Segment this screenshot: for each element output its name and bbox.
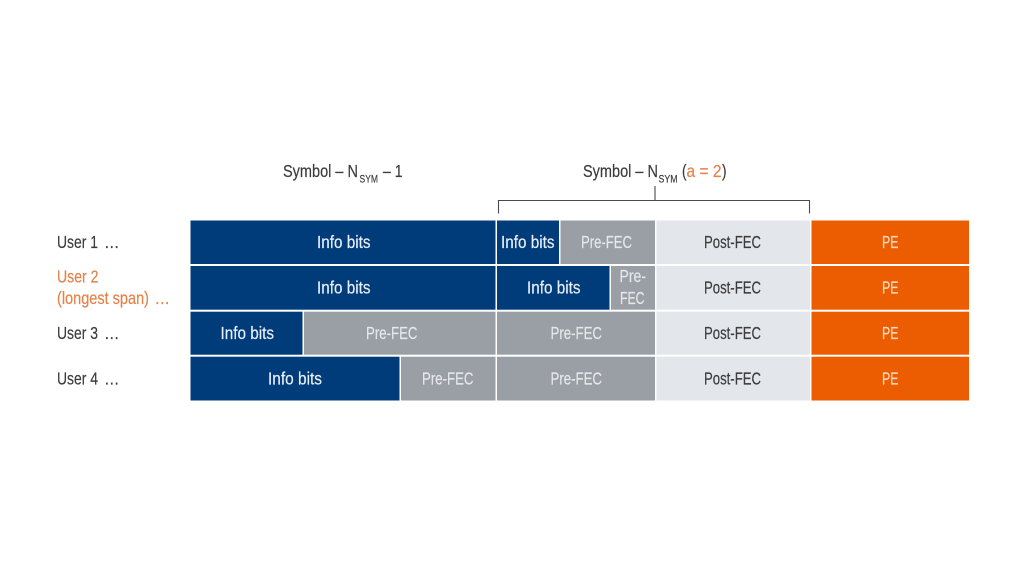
heading: symbol N_SYM with a equals 2: a = 2 bbox=[686, 161, 722, 181]
row: user 2: Pre- bbox=[620, 266, 646, 286]
row: user 1 bbox=[190, 220, 969, 264]
row: user 4: Post-FEC bbox=[704, 368, 761, 388]
row labels bbox=[57, 232, 170, 388]
row: user 2 bbox=[190, 266, 969, 310]
heading: symbol N_SYM with a equals 2: ) bbox=[722, 161, 726, 181]
row: user 4 bbox=[190, 357, 969, 400]
row: user 3 bbox=[190, 312, 969, 355]
row: user 3: Post-FEC bbox=[704, 323, 761, 343]
label: user 2 longest span: (longest span) bbox=[57, 288, 149, 308]
heading: symbol N_SYM minus 1 bbox=[283, 161, 402, 186]
heading: symbol N_SYM minus 1: – 1 bbox=[383, 161, 402, 181]
heading: symbol N_SYM minus 1: SYM bbox=[360, 174, 378, 186]
row: user 2: FEC bbox=[620, 288, 644, 308]
row: user 1: Info bits bbox=[317, 232, 371, 252]
heading: symbol N_SYM with a equals 2 bbox=[583, 161, 726, 186]
label: user 1: … bbox=[104, 232, 120, 252]
bracket spanning symbol N_SYM bbox=[498, 186, 810, 214]
label: user 3: … bbox=[104, 323, 120, 343]
row: user 1: Info bits bbox=[501, 232, 555, 252]
row: user 2: Post-FEC bbox=[704, 278, 761, 298]
row: user 3: Info bits bbox=[220, 323, 274, 343]
row: user 2: PE bbox=[882, 278, 898, 298]
row: user 2: Info bits bbox=[527, 278, 581, 298]
row: user 1: PE bbox=[882, 232, 898, 252]
frame chart: user rows bbox=[190, 220, 969, 400]
label: user 4: User 4 bbox=[57, 368, 98, 388]
label: user 2 longest span: User 2 bbox=[57, 266, 98, 286]
row: user 2: Info bits bbox=[317, 278, 371, 298]
row: user 1: Post-FEC bbox=[704, 232, 761, 252]
row: user 1: Pre-FEC bbox=[581, 232, 632, 252]
heading: symbol N_SYM with a equals 2: Symbol – N bbox=[583, 161, 658, 181]
row: user 4: Info bits bbox=[268, 368, 322, 388]
row: user 3: Pre-FEC bbox=[550, 323, 602, 343]
label: user 2 longest span: … bbox=[154, 288, 170, 308]
label: user 3: User 3 bbox=[57, 323, 98, 343]
label: user 4: … bbox=[104, 368, 120, 388]
heading: symbol N_SYM with a equals 2: SYM bbox=[658, 174, 678, 186]
label: user 2 longest span bbox=[57, 266, 170, 308]
label: user 1: User 1 bbox=[57, 232, 98, 252]
row: user 3: PE bbox=[882, 323, 898, 343]
row: user 4: PE bbox=[882, 368, 898, 388]
heading: symbol N_SYM minus 1: Symbol – N bbox=[283, 161, 358, 181]
row: user 4: Pre-FEC bbox=[550, 368, 602, 388]
row: user 4: Pre-FEC bbox=[422, 368, 474, 388]
heading: symbol N_SYM with a equals 2: ( bbox=[682, 161, 687, 181]
row: user 3: Pre-FEC bbox=[366, 323, 418, 343]
